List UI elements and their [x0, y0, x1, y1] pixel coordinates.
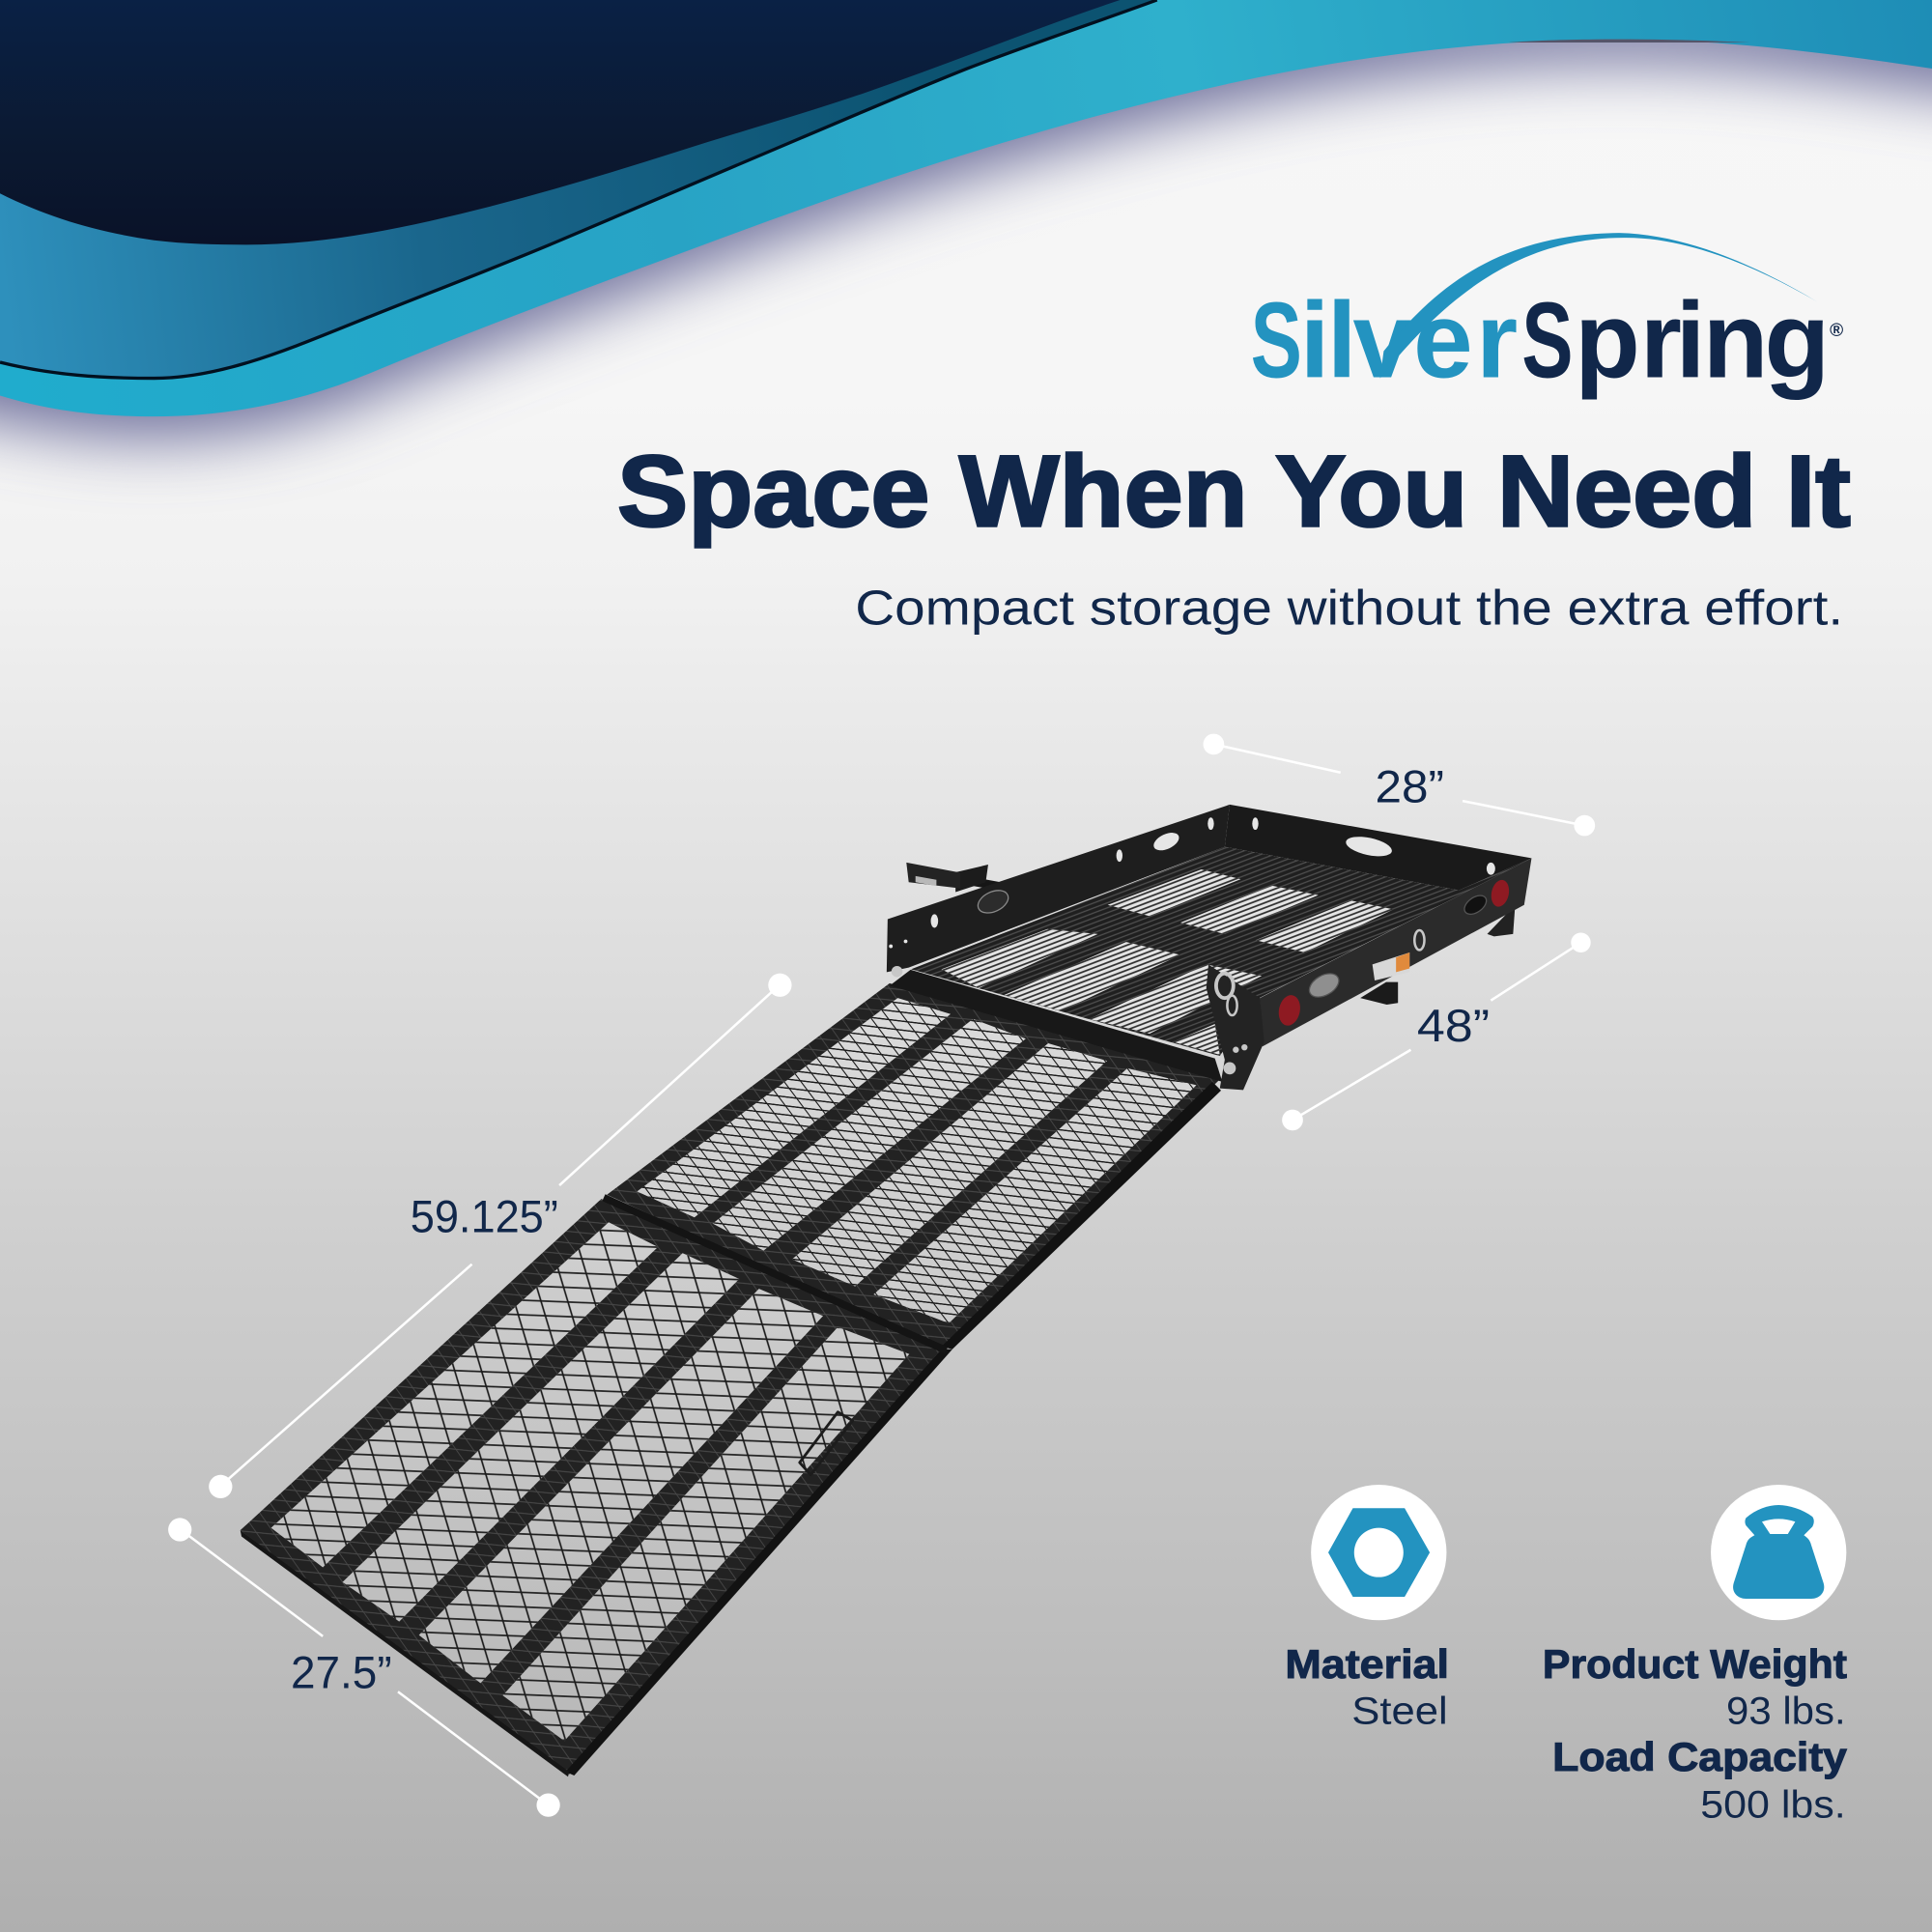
dimension lines — [220, 984, 780, 1486]
material value: Steel — [1351, 1690, 1448, 1732]
wave shadow — [0, 0, 1932, 439]
dimension value: 59.125” — [411, 1192, 558, 1243]
upper ramp mesh strips — [637, 998, 1197, 1323]
icon: kettlebell (weight) — [1711, 1485, 1846, 1620]
title: Space When You Need It — [617, 436, 1851, 549]
lower ramp mesh strips — [271, 1222, 909, 1741]
side panel oval cutouts — [1305, 892, 1490, 1002]
dimension end dots — [1282, 933, 1591, 1130]
dimension end dots — [168, 1518, 560, 1817]
dimension lines — [180, 1529, 549, 1805]
wave header — [0, 0, 1932, 439]
dimension: 28 inch — [1204, 734, 1595, 836]
logo word: Spring: pring — [1575, 280, 1830, 400]
navy top — [0, 0, 1120, 244]
lower ramp frame — [241, 1199, 941, 1775]
registered mark: ® — [1830, 321, 1843, 341]
wall holes — [889, 817, 1495, 949]
black line — [0, 0, 1157, 379]
dimension end dots — [1204, 734, 1595, 836]
dimension: 59.125 inch — [209, 974, 792, 1498]
icon circle — [1711, 1485, 1846, 1620]
lower ramp end edge — [241, 1530, 569, 1776]
dimension: 48 inch — [1282, 933, 1591, 1130]
hitch tube — [906, 863, 960, 889]
hitch flange — [955, 865, 988, 892]
dimension value: 48” — [1417, 1001, 1490, 1052]
dimension lines — [1213, 744, 1584, 826]
side panel — [1260, 858, 1531, 1046]
front crossbar tube — [890, 970, 1222, 1082]
load capacity value: 500 lbs. — [1700, 1783, 1846, 1826]
icon circle — [1311, 1485, 1446, 1620]
upper ramp side rail — [941, 1082, 1221, 1350]
mid blue band — [0, 0, 1157, 379]
upper ramp frame — [607, 983, 1221, 1350]
hinge bar between ramp sections — [604, 1198, 947, 1350]
lower ramp side rail — [565, 1350, 952, 1776]
hitch shaft — [960, 879, 1010, 889]
rear foot — [1488, 905, 1515, 936]
product weight label: Product Weight — [1543, 1641, 1847, 1687]
lower hitch receiver — [1360, 982, 1398, 1005]
dimension end dots — [209, 974, 792, 1498]
subtitle: Compact storage without the extra effort. — [855, 581, 1843, 636]
logo word: Spring: S — [1521, 280, 1574, 400]
stat: material — [1285, 1641, 1449, 1732]
left wall — [887, 805, 1230, 972]
material label: Material — [1285, 1641, 1449, 1687]
folding ramp product — [241, 805, 1531, 1776]
dimension lines — [1293, 943, 1580, 1120]
icon: hex nut (material) — [1311, 1485, 1446, 1620]
silver pins and bolts — [892, 930, 1424, 1074]
back wall — [1225, 805, 1531, 891]
kettlebell shape — [1733, 1505, 1824, 1599]
product weight value: 93 lbs. — [1726, 1690, 1846, 1732]
hinge bracket — [1207, 964, 1264, 1090]
dimension: 27.5 inch — [168, 1518, 560, 1817]
dimension value: 27.5” — [291, 1647, 392, 1698]
upper ramp section — [604, 983, 1221, 1350]
warning sticker — [1373, 952, 1409, 980]
floor windows — [941, 869, 1394, 1055]
logo word: Silver: ilver — [1300, 280, 1518, 400]
carrier floor — [911, 847, 1531, 1056]
load capacity label: Load Capacity — [1552, 1734, 1848, 1779]
sliver behind wave — [1508, 40, 1749, 43]
dimension value: 28” — [1375, 761, 1444, 812]
logo swoosh — [1380, 233, 1817, 379]
lower ramp section — [241, 1199, 952, 1776]
ramp grab handle — [800, 1412, 853, 1475]
red reflectors — [1276, 878, 1512, 1028]
logo: SilverSpring — [1251, 233, 1843, 400]
hitch label — [916, 876, 936, 886]
hitch bar — [906, 863, 1010, 892]
stat: product weight and load capacity — [1543, 1641, 1848, 1826]
cargo carrier — [887, 805, 1531, 1090]
logo word: Silver: S — [1251, 280, 1302, 400]
cyan band — [0, 0, 1932, 416]
hexagon nut — [1328, 1508, 1430, 1597]
